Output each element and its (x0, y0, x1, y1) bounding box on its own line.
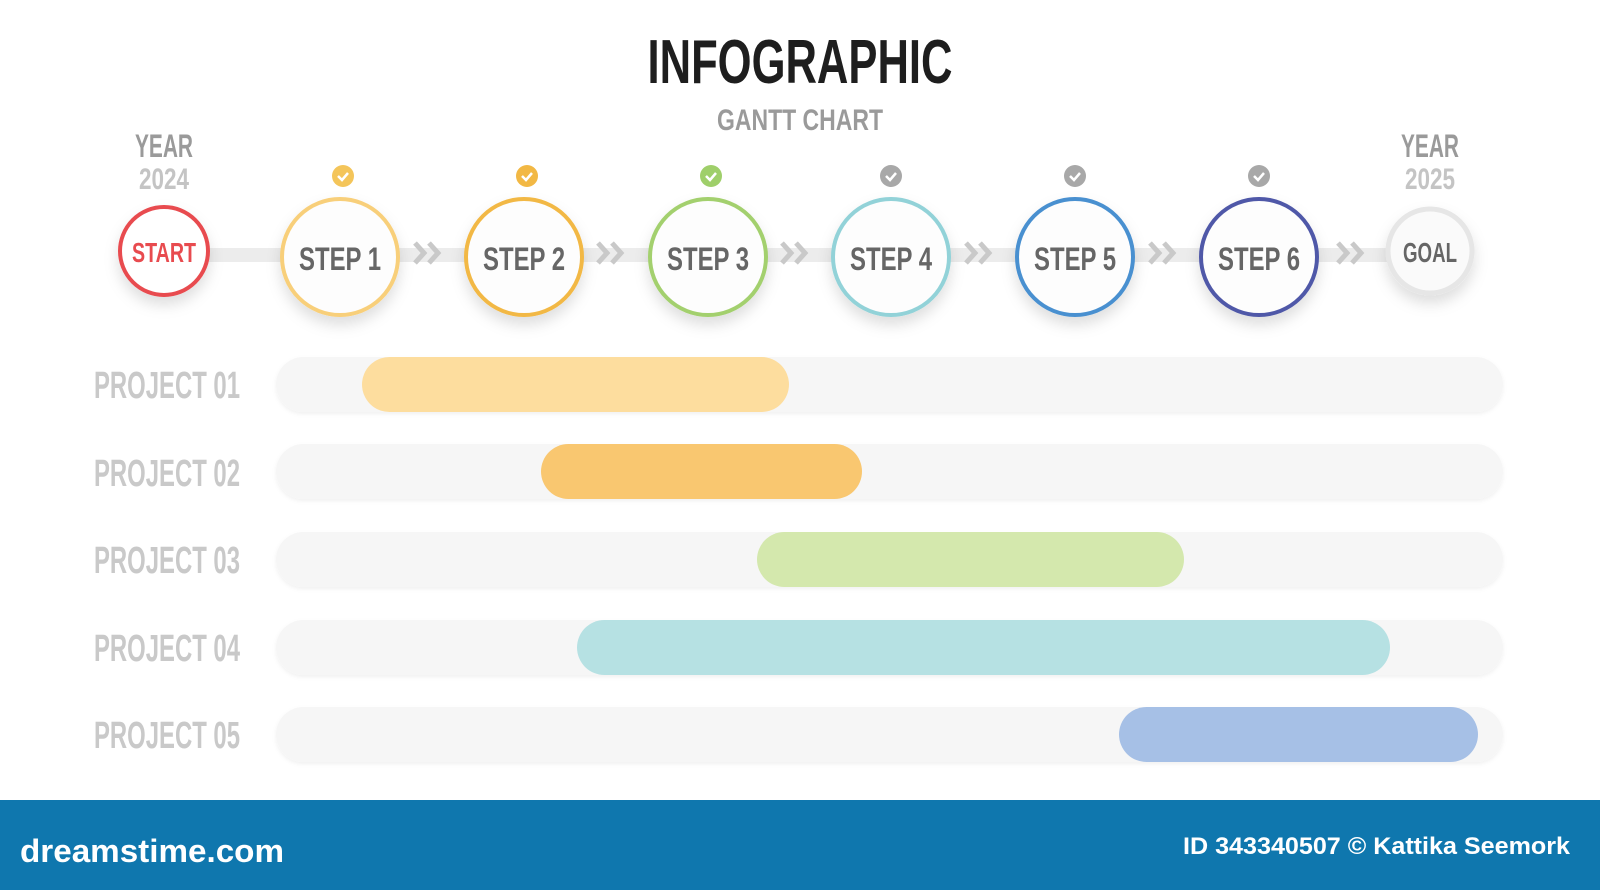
step 1: STEP 1 (299, 241, 381, 277)
title: INFOGRAPHIC (648, 28, 952, 97)
year 2024 label: YEAR (135, 128, 193, 164)
footer bar: ID 343340507 © Kattika Seemork (1183, 833, 1571, 860)
step 1 (282, 165, 398, 315)
step 4 (833, 165, 949, 315)
row: project 04 (94, 620, 1503, 675)
row: project 05: PROJECT 05 (94, 715, 240, 757)
step 3: STEP 3 (667, 241, 749, 277)
row: project 02 (94, 444, 1503, 499)
year 2024 label: 2024 (139, 163, 189, 196)
row: project 02: PROJECT 02 (94, 453, 240, 495)
row: project 01 (94, 357, 1503, 412)
step 5 (1017, 165, 1133, 315)
goal circle (1388, 209, 1472, 293)
year 2025 label: YEAR (1401, 128, 1459, 164)
row: project 03 (94, 532, 1503, 587)
footer bar (0, 800, 1600, 890)
step 4: STEP 4 (850, 241, 932, 277)
row: project 03: PROJECT 03 (94, 540, 240, 582)
gantt rows (94, 357, 1503, 762)
start circle: START (132, 237, 196, 268)
step 3 (650, 165, 766, 315)
year 2025 label (1401, 128, 1459, 196)
year 2024 label (135, 128, 193, 196)
year 2025 label: 2025 (1405, 163, 1455, 196)
goal circle: GOAL (1403, 237, 1457, 268)
row: project 04: PROJECT 04 (94, 628, 240, 670)
step 2 (466, 165, 582, 315)
footer bar: dreamstime.com (20, 833, 284, 869)
step 5: STEP 5 (1034, 241, 1116, 277)
row: project 05 (94, 707, 1503, 762)
step 6: STEP 6 (1218, 241, 1300, 277)
arrows (415, 243, 1361, 263)
subtitle: GANTT CHART (717, 104, 883, 137)
start circle (120, 207, 208, 295)
connector line (170, 248, 1430, 262)
step 2: STEP 2 (483, 241, 565, 277)
row: project 01: PROJECT 01 (94, 365, 240, 407)
step 6 (1201, 165, 1317, 315)
